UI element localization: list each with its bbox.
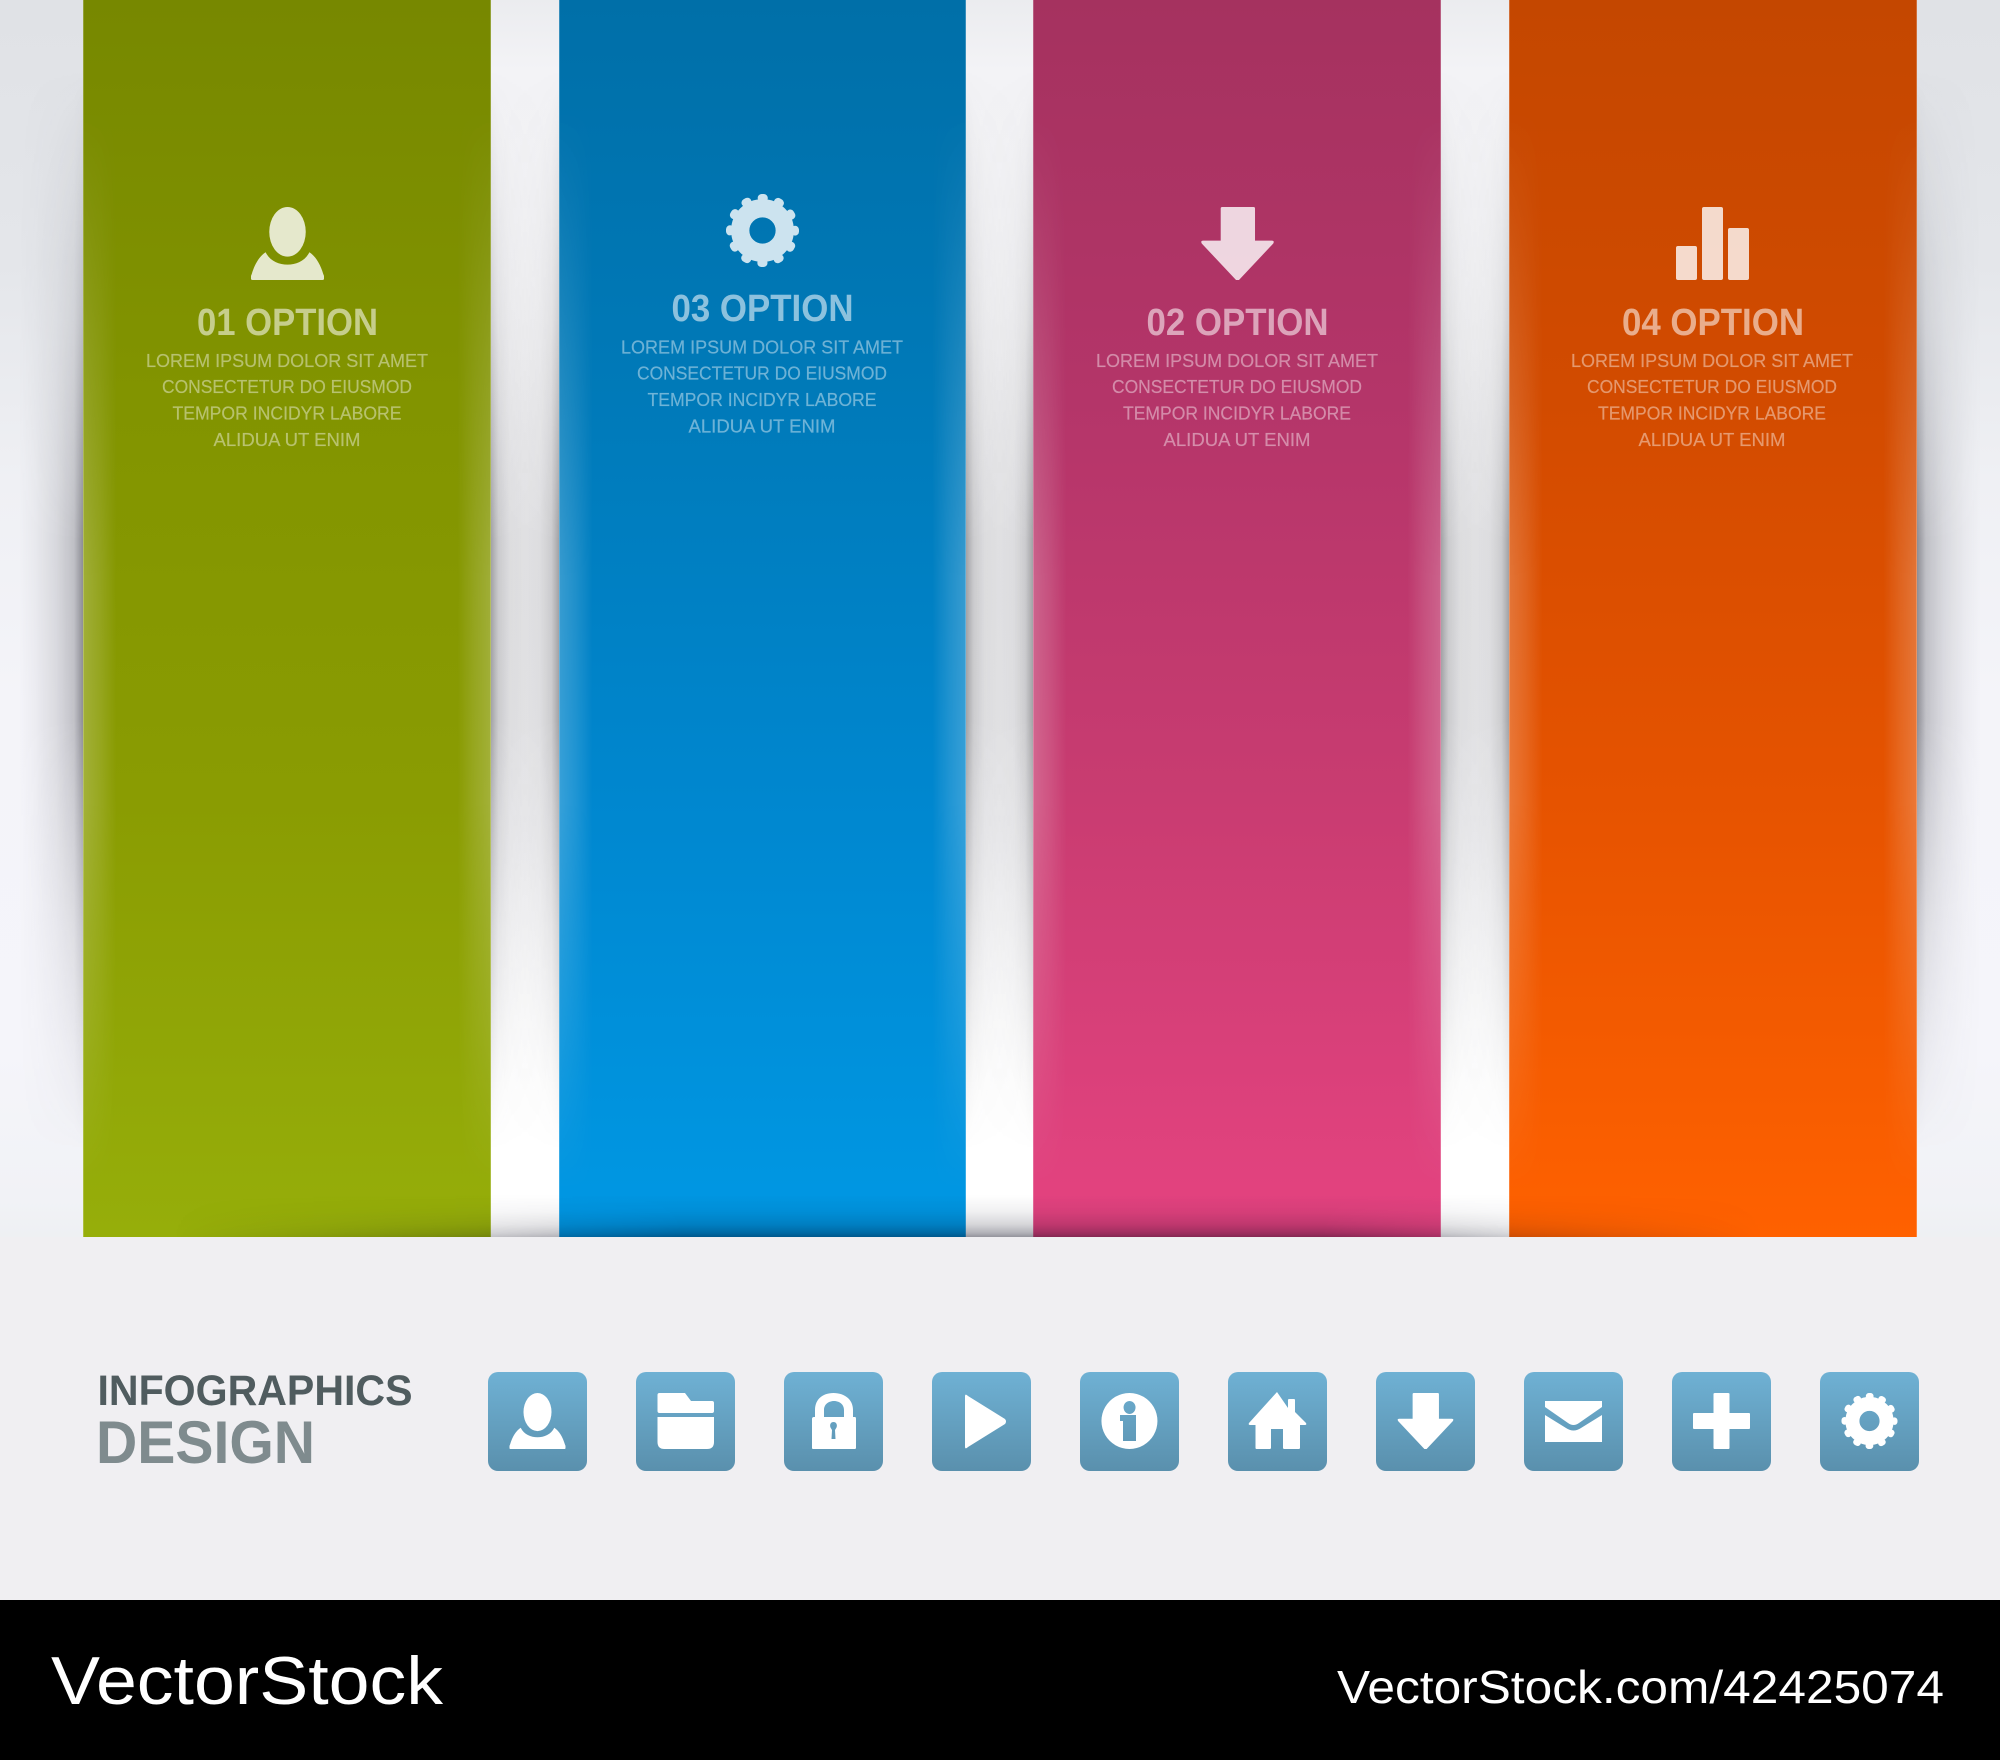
body text: lorem ipsum: ALIDUA UT ENIM xyxy=(214,430,360,450)
body text: lorem ipsum: LOREM IPSUM DOLOR SIT AMET xyxy=(1571,351,1853,371)
icon: gear xyxy=(730,198,795,263)
body text: lorem ipsum: ALIDUA UT ENIM xyxy=(1164,430,1310,450)
gap between pink and orange panels xyxy=(1440,0,1510,1237)
icon tile: download arrow xyxy=(1376,1372,1475,1471)
right background strip xyxy=(1916,0,2000,1237)
icon tile: folder xyxy=(636,1372,735,1471)
logo text: VectorStock xyxy=(51,1643,444,1719)
icon tile: person xyxy=(488,1372,587,1471)
icon tile: gear xyxy=(1820,1372,1919,1471)
heading: 02 option: 02 OPTION xyxy=(1146,302,1328,344)
icon tile: padlock xyxy=(784,1372,883,1471)
body text: lorem ipsum: CONSECTETUR DO EIUSMOD xyxy=(1112,377,1362,397)
body text: lorem ipsum: TEMPOR INCIDYR LABORE xyxy=(172,404,402,424)
heading: 04 option: 04 OPTION xyxy=(1622,302,1804,344)
image id url: VectorStock.com/42425074 xyxy=(1337,1661,1944,1713)
left background strip xyxy=(0,0,84,1237)
title: infographics design xyxy=(96,1367,412,1476)
icon tile: play xyxy=(932,1372,1031,1471)
body text: lorem ipsum: ALIDUA UT ENIM xyxy=(688,416,836,436)
body text: lorem ipsum: TEMPOR INCIDYR LABORE xyxy=(1598,404,1826,424)
body text: lorem ipsum: CONSECTETUR DO EIUSMOD xyxy=(162,377,412,397)
body text: lorem ipsum: LOREM IPSUM DOLOR SIT AMET xyxy=(146,351,428,371)
gap between blue and pink panels xyxy=(965,0,1035,1237)
icon tile: house xyxy=(1228,1372,1327,1471)
footer bar: vectorstock watermark xyxy=(0,1600,2000,1760)
icon: person xyxy=(251,207,324,280)
body text: lorem ipsum: CONSECTETUR DO EIUSMOD xyxy=(637,364,887,384)
panel: 01 option (green) xyxy=(83,0,491,1237)
body text: lorem ipsum: CONSECTETUR DO EIUSMOD xyxy=(1587,377,1837,397)
heading: 03 option: 03 OPTION xyxy=(672,288,854,330)
body text: lorem ipsum xyxy=(1096,351,1378,450)
gap between green and blue panels xyxy=(490,0,560,1237)
heading: 01 option: 01 OPTION xyxy=(197,302,378,344)
body text: lorem ipsum xyxy=(146,351,428,450)
title: infographics design: INFOGRAPHICS xyxy=(98,1367,412,1415)
body text: lorem ipsum: LOREM IPSUM DOLOR SIT AMET xyxy=(621,338,903,358)
icon tile: info xyxy=(1080,1372,1179,1471)
title: infographics design: DESIGN xyxy=(96,1409,315,1476)
body text: lorem ipsum: LOREM IPSUM DOLOR SIT AMET xyxy=(1096,351,1378,371)
icon tile: plus xyxy=(1672,1372,1771,1471)
panel: 02 option (pink) xyxy=(1033,0,1441,1237)
panel: 04 option (orange) xyxy=(1509,0,1917,1237)
body text: lorem ipsum xyxy=(1571,351,1853,450)
panel: 03 option (blue) xyxy=(559,0,966,1237)
lower section: title and icon row xyxy=(96,1367,1919,1476)
body text: lorem ipsum: ALIDUA UT ENIM xyxy=(1638,430,1786,450)
icon: bar chart xyxy=(1676,207,1749,280)
icon tile: envelope xyxy=(1524,1372,1623,1471)
body text: lorem ipsum xyxy=(621,338,903,436)
body text: lorem ipsum: TEMPOR INCIDYR LABORE xyxy=(1123,404,1351,424)
icon: down arrow xyxy=(1201,207,1274,280)
body text: lorem ipsum: TEMPOR INCIDYR LABORE xyxy=(648,390,876,410)
